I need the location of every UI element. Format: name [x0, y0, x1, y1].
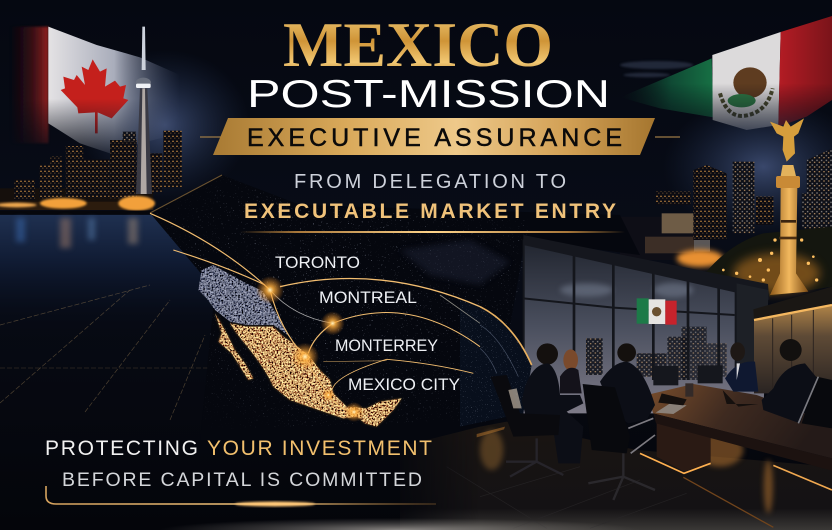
panel: boardroom	[400, 235, 832, 530]
Angel of Independence monument	[770, 118, 808, 295]
Lake Ontario water	[0, 215, 215, 350]
sky glow behind Toronto	[80, 50, 250, 200]
dim continent north of Mexico	[400, 240, 510, 285]
Mexico City skyline	[620, 149, 832, 297]
city seen through window	[586, 327, 727, 380]
laptops and documents	[653, 365, 758, 414]
right wall panels	[753, 287, 832, 393]
chair right	[798, 377, 832, 428]
perspective road lines	[0, 285, 210, 420]
glowing Mexico map	[215, 313, 402, 427]
title: Mexico: MEXICO	[283, 9, 553, 80]
cloud streaks	[620, 61, 693, 77]
city label: Monterrey: MONTERREY	[335, 337, 438, 355]
maple leaf	[61, 59, 128, 133]
panel: Mexico City scene	[620, 16, 832, 297]
CN Tower	[136, 27, 152, 194]
window mullions	[523, 239, 737, 380]
seated executives	[522, 339, 817, 463]
title: Post-Mission: POST-MISSION	[247, 73, 610, 116]
panel: Mexico route map	[150, 213, 480, 427]
office chairs	[491, 375, 832, 500]
banner: Executive Assurance	[200, 118, 680, 155]
person 1	[522, 343, 583, 463]
water reflections	[16, 218, 138, 248]
tagline	[45, 437, 436, 506]
sky glow behind Mexico City	[663, 97, 832, 237]
city label: Mexico City: MEXICO CITY	[348, 376, 460, 394]
panel: Toronto scene	[0, 27, 250, 420]
person 4	[725, 342, 758, 392]
tagline line two: BEFORE CAPITAL IS COMMITTED	[62, 469, 422, 491]
tagline line one: PROTECTING	[45, 437, 198, 460]
city nodes	[256, 276, 364, 422]
table glow on floor	[697, 433, 743, 467]
person 5	[762, 339, 817, 423]
Mexican flag	[620, 16, 832, 130]
Toronto skyline	[0, 131, 182, 214]
subtitle: Executable market entry: EXECUTABLE MARKET ENTRY	[244, 200, 616, 223]
floor	[400, 422, 832, 530]
person 3	[600, 343, 655, 423]
chair centre	[583, 384, 655, 500]
tagline highlight: YOUR INVESTMENT	[207, 437, 432, 460]
gold underline bracket	[46, 486, 436, 506]
person 2	[560, 349, 582, 393]
eagle emblem	[720, 67, 773, 116]
chair left	[491, 375, 563, 477]
floor reflection of window light	[480, 430, 503, 470]
gold divider	[240, 231, 625, 233]
tree mound with lights	[705, 227, 832, 297]
window frame top	[523, 235, 769, 300]
floor glow at bottom	[160, 506, 640, 530]
city label: Montreal: MONTREAL	[319, 289, 417, 307]
starry curved glass	[460, 300, 532, 427]
starfield sheet and globe	[150, 175, 660, 440]
subtitle: From delegation to: FROM DELEGATION TO	[294, 171, 566, 193]
Canadian flag	[10, 27, 180, 153]
dim North America landmass	[198, 265, 290, 337]
flight arcs	[150, 213, 480, 412]
window wall	[523, 235, 769, 413]
banner: Executive Assurance: EXECUTIVE ASSURANCE	[247, 124, 622, 152]
boardroom table	[640, 384, 832, 527]
small Mexican flag	[637, 298, 677, 325]
city label: Toronto: TORONTO	[275, 254, 360, 272]
